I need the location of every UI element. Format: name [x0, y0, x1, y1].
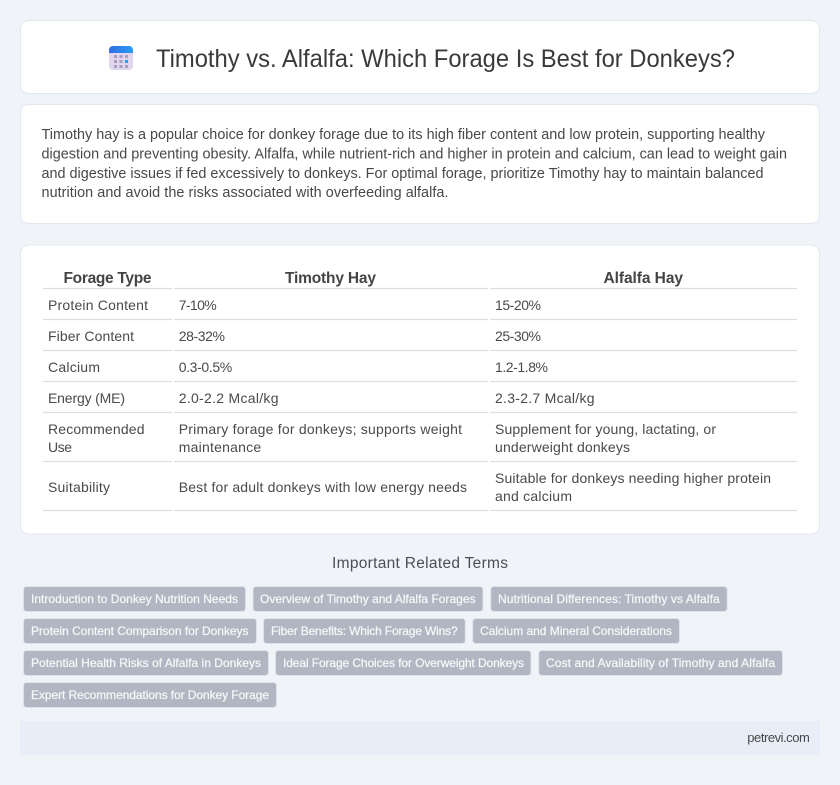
tag: [253, 586, 483, 612]
footer site name: petrevi.com: [747, 730, 810, 745]
row: fiber content: Fiber Content: [48, 328, 134, 344]
related terms tags: [24, 586, 782, 708]
intro paragraph: [42, 127, 787, 201]
tag: Protein Content Comparison for Donkeys: [31, 624, 248, 638]
heading: important related terms: Important Related Terms: [332, 555, 508, 572]
tag: Introduction to Donkey Nutrition Needs: [31, 592, 238, 606]
tag: Expert Recommendations for Donkey Forage: [31, 688, 269, 702]
row: calcium: Calcium: [48, 359, 100, 375]
row: suitability: [48, 470, 771, 504]
row: energy: [48, 390, 594, 406]
row: suitability: Suitable for donkeys needing higher protein: [495, 470, 771, 486]
row: protein content: Protein Content: [48, 297, 148, 313]
tag: Cost and Availability of Timothy and Alfalfa: [546, 656, 775, 670]
table header row: Alfalfa Hay: [604, 270, 683, 287]
tag: Fiber Benefits: Which Forage Wins?: [271, 624, 458, 638]
row: recommended use: Use: [48, 439, 72, 455]
tag: [264, 618, 465, 644]
tag: [24, 586, 246, 612]
row: suitability: Suitability: [48, 479, 110, 495]
row: calcium: 0.3-0.5%: [179, 359, 232, 375]
tag: [539, 650, 782, 676]
tag: Calcium and Mineral Considerations: [480, 624, 672, 638]
row: recommended use: Supplement for young, lactating, or: [495, 421, 716, 437]
row: fiber content: 25-30%: [495, 328, 541, 344]
row: energy: 2.3-2.7 Mcal/kg: [495, 390, 594, 406]
row: recommended use: Primary forage for donkeys; supports weight: [179, 421, 462, 437]
row: calcium: 1.2-1.8%: [495, 359, 548, 375]
intro paragraph: and digestive issues if fed excessively to donkeys. For optimal forage, prioritize Timothy hay to maintain balanced: [42, 166, 764, 182]
row: suitability: and calcium: [495, 488, 572, 504]
row: fiber content: 28-32%: [179, 328, 225, 344]
table header row: Forage Type: [64, 270, 152, 287]
row: recommended use: Recommended: [48, 421, 144, 437]
intro paragraph: Timothy hay is a popular choice for donkey forage due to its high fiber content and low protein, supporting healthy: [42, 127, 766, 143]
tag: Nutritional Differences: Timothy vs Alfalfa: [498, 592, 720, 606]
row: recommended use: underweight donkeys: [495, 439, 630, 455]
table header row: [64, 270, 683, 287]
panel: introduction text: [20, 104, 820, 224]
row: fiber content: [48, 328, 541, 344]
row: energy: 2.0-2.2 Mcal/kg: [179, 390, 278, 406]
panel: comparison table: [20, 245, 820, 534]
panel: header: [20, 20, 820, 94]
row: protein content: [48, 297, 541, 313]
tag: [276, 650, 531, 676]
tag: [473, 618, 680, 644]
table header row: Timothy Hay: [285, 270, 376, 287]
row: energy: Energy (ME): [48, 390, 125, 406]
row: recommended use: [48, 421, 716, 455]
row: protein content: 15-20%: [495, 297, 541, 313]
icon: calendar: [109, 46, 133, 70]
row: suitability: Best for adult donkeys with low energy needs: [179, 479, 467, 495]
intro paragraph: nutrition and avoid the risks associated with overfeeding alfalfa.: [42, 185, 448, 201]
tag: [491, 586, 727, 612]
row: recommended use: maintenance: [179, 439, 261, 455]
row: calcium: [48, 359, 548, 375]
tag: [24, 618, 256, 644]
row: protein content: 7-10%: [179, 297, 217, 313]
footer: [20, 721, 820, 755]
tag: [24, 682, 276, 708]
tag: [24, 650, 268, 676]
tag: Potential Health Risks of Alfalfa in Donkeys: [31, 656, 261, 670]
intro paragraph: digestion and preventing obesity. Alfalfa, while nutrient-rich and higher in protein and calcium, can lead to weight gain: [42, 146, 787, 162]
title: Timothy vs. Alfalfa: Which Forage Is Best for Donkeys?: [156, 45, 735, 73]
tag: Ideal Forage Choices for Overweight Donkeys: [283, 656, 524, 670]
tag: Overview of Timothy and Alfalfa Forages: [260, 592, 476, 606]
